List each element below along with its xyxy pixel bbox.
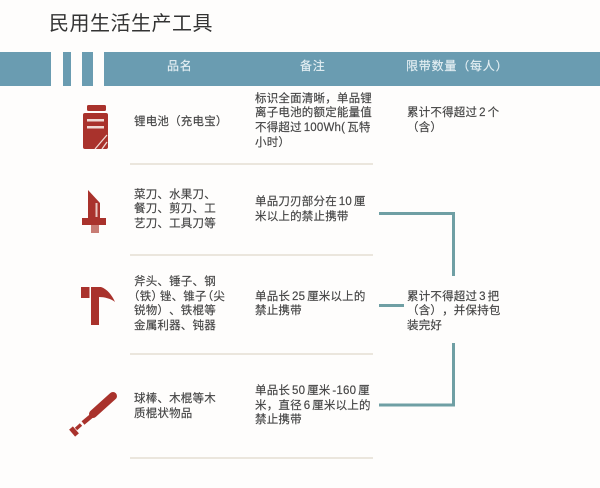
row 2-4 limit (407, 290, 501, 332)
row 1 remark: 小时） (255, 137, 290, 149)
table header bar (0, 52, 600, 86)
row 1 remark: 标识全面清晰，单品锂 (255, 92, 372, 104)
row 2 name: 菜刀、水果刀、 (134, 188, 216, 200)
row 3 name: （铁）锉、锥子（尖 (128, 291, 225, 303)
row 4 name (134, 392, 216, 420)
row 1 limit (407, 106, 499, 134)
row 1 remark: 不得超过 100Wh(瓦特 (255, 122, 371, 134)
row 1 remark: 离子电池的额定能量值 (255, 107, 372, 119)
row 3 name (128, 275, 225, 332)
row 4 remark (255, 384, 371, 426)
row 1 name: 锂电池（充电宝） (134, 116, 228, 128)
row 2 name: 餐刀、剪刀、工 (134, 203, 216, 215)
row 2-4 limit: （含），并保持包 (407, 305, 501, 317)
header: quantity limit: 限带数量（每人） (406, 59, 508, 73)
row 2 remark: 米以上的禁止携带 (255, 211, 349, 223)
header: item name: 品名 (167, 59, 193, 73)
row 4 name: 质棍状物品 (134, 408, 192, 420)
icon: hammer (81, 287, 115, 325)
row 4 remark: 单品长 50 厘米 -160 厘 (255, 385, 370, 397)
row 3 name: 斧头、锤子、钢 (134, 276, 216, 288)
row 2 name (134, 188, 216, 230)
row 4 name: 球棒、木棍等木 (134, 393, 216, 405)
row 4 remark: 米，直径 6 厘米以上的 (255, 400, 371, 412)
row 1 limit: （含） (407, 122, 442, 134)
row 3 name: 金属利器、钝器 (134, 320, 216, 332)
row 2 name: 艺刀、工具刀等 (134, 218, 216, 230)
row 2 remark (255, 195, 366, 223)
title: 民用生活生产工具 (49, 13, 213, 35)
row rules (130, 163, 373, 459)
row 2-4 limit: 装完好 (407, 320, 442, 332)
row 3 remark: 单品长 25 厘米以上的 (255, 290, 366, 302)
icon: baseball bat (69, 392, 117, 437)
bracket connector (379, 212, 455, 406)
row 3 remark: 禁止携带 (255, 305, 302, 317)
icon: knife (82, 190, 106, 233)
row 4 remark: 禁止携带 (255, 414, 302, 426)
row 1 remark (255, 92, 372, 149)
icon: lithium battery (83, 105, 108, 150)
header: remarks: 备注 (300, 59, 326, 73)
row 2 remark: 单品刀刃部分在 10 厘 (255, 196, 366, 208)
row 1 limit: 累计不得超过 2 个 (407, 107, 499, 119)
row 3 name: 锐物）、铁棍等 (134, 305, 216, 317)
row 3 remark (255, 290, 366, 317)
row 2-4 limit: 累计不得超过 3 把 (407, 290, 499, 302)
